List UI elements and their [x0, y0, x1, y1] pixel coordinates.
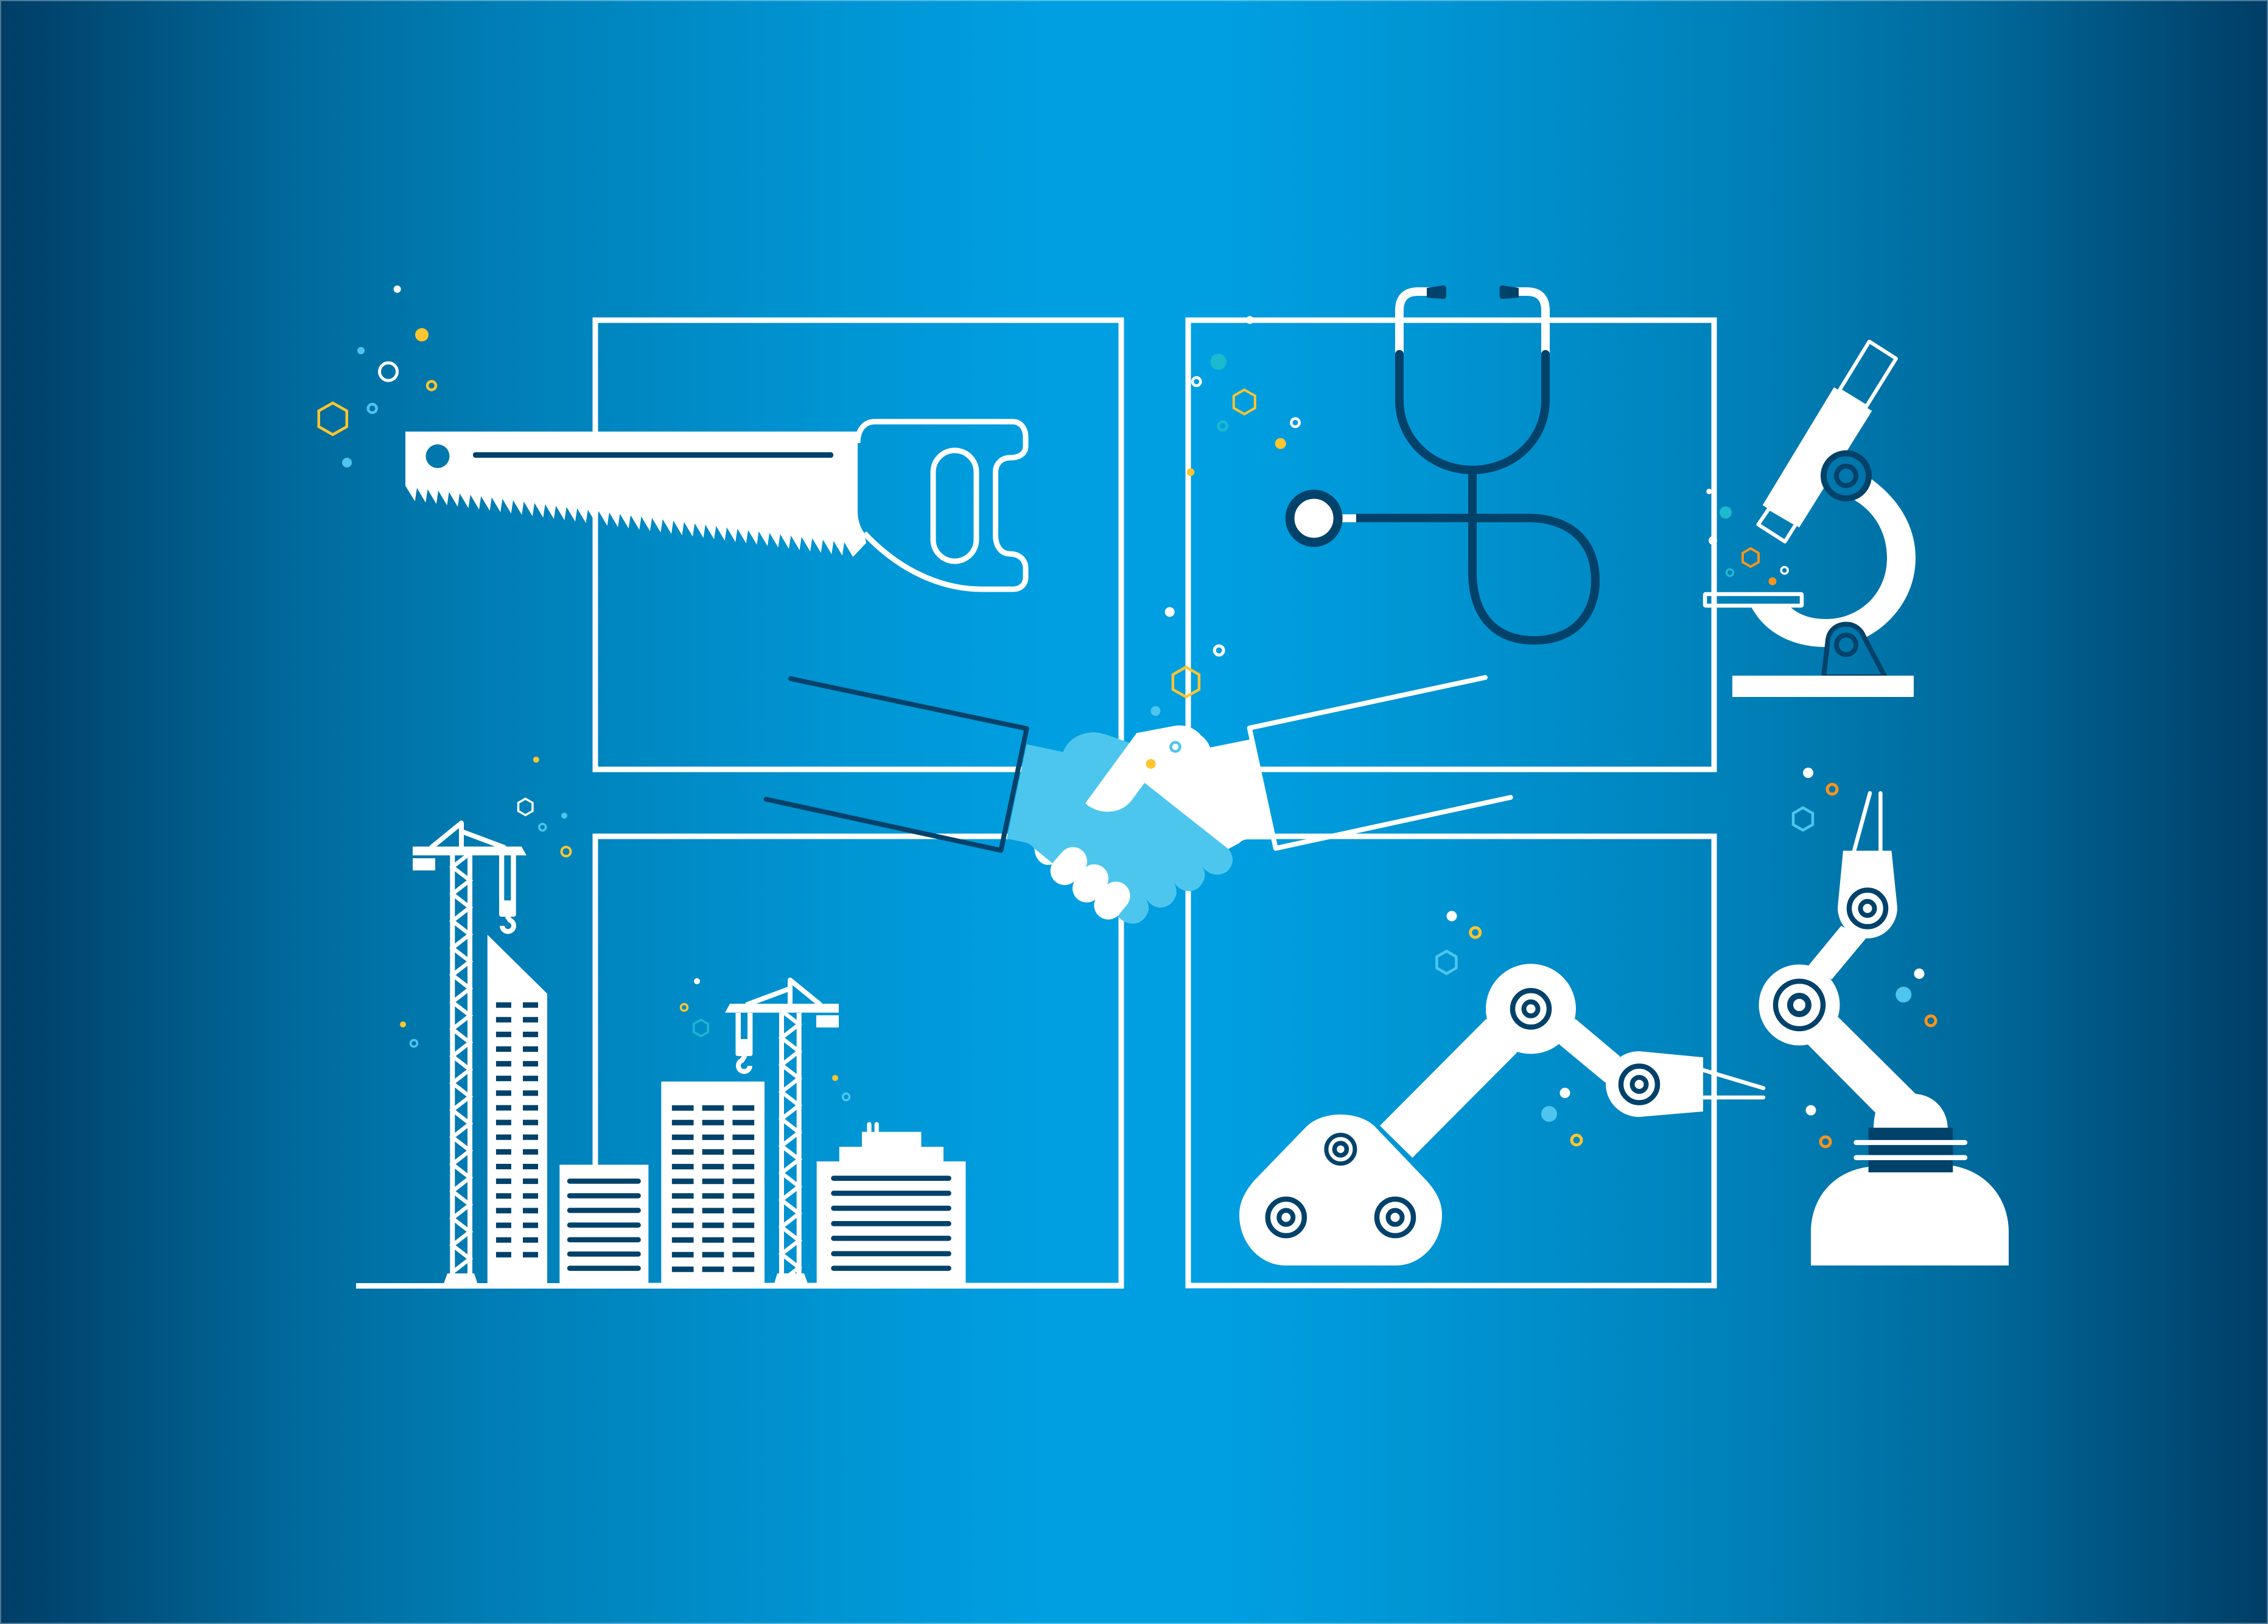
- icon: robot arm right: [1759, 793, 2009, 1265]
- stepped building: [817, 1124, 965, 1284]
- frame: top right: [1188, 320, 1714, 769]
- gripper head: [1606, 1051, 1703, 1117]
- particles on handshake: [1146, 607, 1223, 769]
- crane right base: [774, 1273, 808, 1284]
- crane right: [725, 980, 839, 1284]
- crane left counterweight: [413, 858, 435, 870]
- crane right lattice: [782, 1011, 799, 1281]
- gripper target: [1621, 1066, 1657, 1103]
- microscope base: [1732, 676, 1914, 697]
- small building window bands: [570, 1181, 639, 1269]
- crane left jib: [413, 847, 527, 855]
- four square frames: [595, 320, 1714, 1286]
- upper link: [1808, 926, 1866, 979]
- icon: hand saw: [405, 422, 1026, 589]
- microscope arm: [1751, 478, 1916, 647]
- saw handle outline: [858, 422, 1026, 589]
- particles: construction: [400, 757, 850, 1101]
- microscope tube: [1763, 387, 1872, 527]
- icon: microscope: [1705, 341, 1916, 697]
- chest piece: [1290, 494, 1338, 542]
- elbow target: [1513, 990, 1549, 1027]
- elbow joint: [1486, 964, 1576, 1054]
- crane right hook arm: [735, 1013, 752, 1056]
- U shaped tube: [1399, 354, 1545, 470]
- middle joint: [1759, 964, 1839, 1046]
- chest piece stub: [1339, 514, 1356, 522]
- stepped building body: [817, 1132, 965, 1284]
- white hand: [1085, 726, 1275, 849]
- crane left base: [443, 1273, 478, 1284]
- small building: [559, 1165, 648, 1284]
- frame: top left: [595, 320, 1121, 769]
- objective lens: [1758, 508, 1796, 542]
- crane left lattice: [452, 853, 470, 1272]
- small building body: [559, 1165, 648, 1284]
- saw blade with teeth: [405, 432, 866, 557]
- small white finger behind: [1034, 846, 1054, 865]
- white fingers: [1065, 861, 1116, 905]
- base target top: [1326, 1135, 1355, 1164]
- lower knob: [1836, 635, 1856, 654]
- saw hole: [426, 444, 449, 468]
- frame: bottom left: [595, 836, 1121, 1286]
- icon: handshake: [766, 607, 1511, 923]
- left earpiece: [1399, 292, 1430, 359]
- lower arm segment: [1380, 1019, 1517, 1158]
- right earpiece: [1516, 292, 1545, 359]
- crane right apex: [747, 980, 820, 1004]
- crane right jib: [725, 1004, 839, 1013]
- crane left: [413, 823, 527, 1284]
- white cuff outline: [1250, 677, 1511, 849]
- light blue hand: [1007, 732, 1233, 923]
- crane left hook: [502, 916, 514, 931]
- robot base plate: [1239, 1115, 1442, 1265]
- base target left: [1268, 1199, 1304, 1236]
- middle building windows: [683, 1105, 743, 1272]
- rooftop antennas: [869, 1124, 877, 1133]
- crane right counterweight: [816, 1015, 839, 1027]
- middle building body: [661, 1082, 765, 1284]
- middle target: [1776, 981, 1823, 1029]
- middle building: [661, 1082, 765, 1284]
- gripper fingers: [1703, 1070, 1763, 1097]
- upper knob: [1824, 453, 1869, 499]
- crane left tower rails: [452, 855, 470, 1275]
- left cuff outline: [766, 679, 1027, 850]
- looped tube: [1357, 470, 1595, 640]
- particles: microscope: [1706, 489, 1788, 586]
- particles: saw: [319, 285, 436, 467]
- particles: stethoscope: [1187, 316, 1300, 476]
- crane left hook arm: [499, 855, 516, 917]
- microscope stage: [1705, 594, 1802, 606]
- tall building: [488, 935, 547, 1284]
- saw handle grip hole: [933, 450, 976, 561]
- dark collar: [1869, 1128, 1953, 1172]
- base target right: [1377, 1199, 1413, 1236]
- crane left apex: [432, 823, 504, 847]
- eyepiece: [1839, 341, 1896, 407]
- tall building windows: [503, 1003, 531, 1260]
- lower link with shoulder: [1808, 1017, 1948, 1130]
- upper arm segment: [1559, 1019, 1620, 1083]
- particles: robot arm right: [1793, 768, 1936, 1147]
- saw slot: [473, 452, 833, 458]
- head link: [1838, 851, 1897, 939]
- particles: robot arm in frame: [1437, 911, 1581, 1145]
- head target: [1849, 890, 1886, 926]
- right ear tip: [1500, 285, 1519, 299]
- ground line: [356, 1283, 1124, 1289]
- frame: bottom right: [1188, 836, 1714, 1286]
- collar stripes: [1857, 1143, 1965, 1158]
- tall building body: [488, 935, 547, 1284]
- icon: construction skyline: [356, 823, 1124, 1289]
- dome base: [1811, 1166, 2009, 1265]
- stand: [1824, 625, 1885, 677]
- gripper fingers: [1854, 793, 1880, 851]
- upper knob centre: [1836, 466, 1856, 486]
- crane right tower rails: [782, 1013, 799, 1275]
- stepped building window bands: [834, 1178, 949, 1269]
- icon: robot arm in frame: [1239, 964, 1763, 1265]
- left ear tip: [1427, 285, 1446, 299]
- crane right hook: [738, 1055, 750, 1071]
- icon: stethoscope: [1290, 285, 1595, 640]
